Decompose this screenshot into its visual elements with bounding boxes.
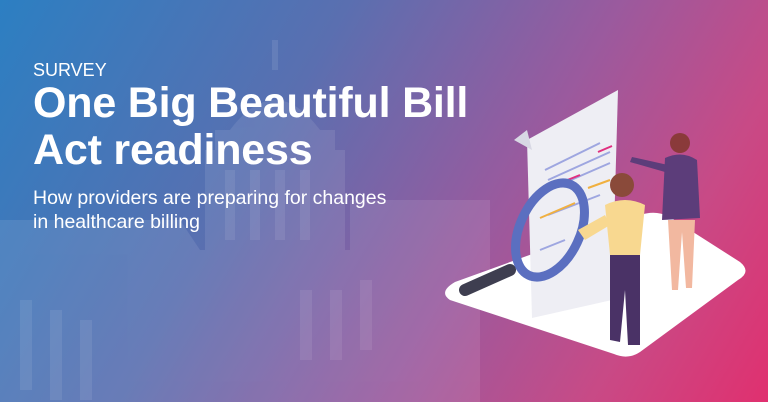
title: One Big Beautiful Bill (33, 79, 468, 127)
platform (445, 213, 746, 357)
subtitle (33, 187, 386, 233)
magnifier (465, 172, 598, 290)
title (33, 79, 468, 174)
woman (630, 133, 700, 290)
paper (514, 90, 618, 318)
label: SURVEY: SURVEY (33, 60, 107, 80)
subtitle: in healthcare billing (33, 211, 200, 233)
subtitle: How providers are preparing for changes (33, 187, 386, 209)
man (578, 173, 645, 345)
title: Act readiness (33, 126, 312, 174)
